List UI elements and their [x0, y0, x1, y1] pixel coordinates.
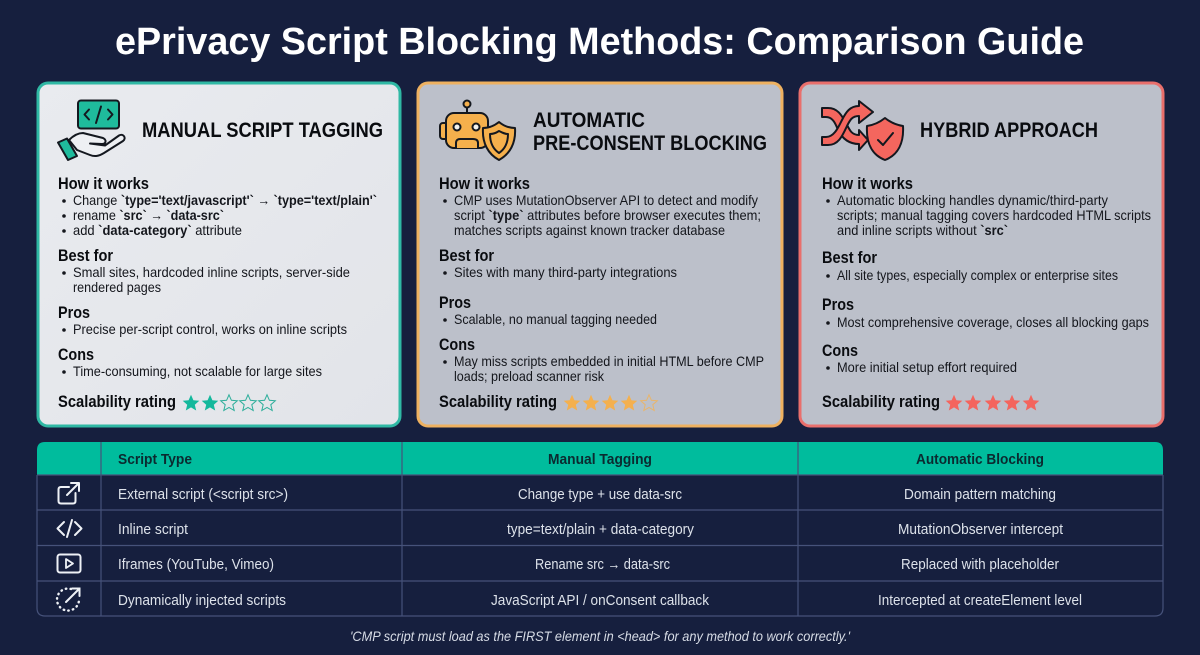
section: how it works: add `data-category` attribute — [73, 222, 242, 238]
section: pros — [58, 303, 347, 337]
scalability rating: 2 of 5: Scalability rating — [58, 392, 176, 411]
heading: automatic pre-consent blocking: AUTOMATIC — [533, 109, 645, 132]
section: how it works: CMP uses MutationObserver API to detect and modify — [454, 192, 758, 208]
section: how it works: How it works — [58, 174, 149, 193]
row: dynamically injected scripts: JavaScript API / onConsent callback — [491, 592, 709, 609]
icon: hand holding code — [58, 100, 125, 160]
row: external script — [58, 483, 1056, 504]
title: ePrivacy Script Blocking Methods: Comparison Guide — [115, 21, 1084, 63]
scalability rating: 4 of 5: Scalability rating — [439, 392, 557, 411]
row: dynamically injected scripts: Intercepted at createElement level — [878, 592, 1082, 609]
section: how it works: How it works — [822, 174, 913, 193]
section: how it works — [822, 174, 1151, 238]
scalability rating: 2 of 5 — [58, 392, 275, 411]
row: inline script — [58, 520, 1064, 538]
section: how it works: and inline scripts without `src` — [837, 222, 1008, 238]
section: how it works — [439, 174, 761, 238]
row: iframes: Iframes (YouTube, Vimeo) — [118, 556, 274, 573]
row: inline script: MutationObserver intercept — [898, 521, 1064, 538]
section: best for: Small sites, hardcoded inline scripts, server-side — [73, 264, 350, 280]
row: inline script: type=text/plain + data-category — [507, 521, 694, 538]
comparison table — [37, 442, 1163, 616]
section: cons — [822, 341, 1017, 375]
icon: code brackets — [58, 520, 82, 537]
section: pros: Precise per-script control, works on inline scripts — [73, 321, 347, 337]
footnote: 'CMP script must load as the FIRST element in <head> for any method to work correctly.' — [350, 628, 851, 644]
heading: manual script tagging: MANUAL SCRIPT TAGGING — [142, 119, 383, 142]
section: cons: Cons — [58, 345, 94, 364]
section: cons: Cons — [822, 341, 858, 360]
icon: dotted circle with arrow — [57, 588, 80, 611]
section: best for — [822, 248, 1118, 283]
icon: crossing arrows with shield — [822, 101, 903, 160]
table header: Automatic Blocking — [916, 451, 1044, 468]
section: best for — [439, 246, 677, 280]
section: pros: Pros — [58, 303, 90, 322]
section: how it works: matches scripts against known tracker database — [454, 222, 725, 238]
row: iframes: Replaced with placeholder — [901, 556, 1059, 573]
section: how it works: scripts; manual tagging covers hardcoded HTML scripts — [837, 207, 1151, 223]
section: pros: Most comprehensive coverage, closes all blocking gaps — [837, 314, 1149, 330]
section: how it works: script `type` attributes before browser executes them; — [454, 207, 761, 223]
section: best for: Sites with many third-party integrations — [454, 264, 677, 280]
section: how it works: Change `type='text/javascript'` → `type='text/plain'` — [73, 192, 377, 208]
section: cons: More initial setup effort required — [837, 359, 1017, 375]
row: external script: Domain pattern matching — [904, 486, 1056, 503]
row: inline script: Inline script — [118, 521, 189, 538]
table header — [37, 442, 1163, 475]
section: best for — [58, 246, 350, 295]
section: best for: Best for — [439, 246, 494, 265]
icon: robot with shield — [440, 100, 515, 160]
section: cons: Time-consuming, not scalable for large sites — [73, 363, 322, 379]
section: cons — [439, 335, 764, 384]
section: cons: May miss scripts embedded in initial HTML before CMP — [454, 353, 764, 369]
row: iframes — [58, 554, 1059, 573]
section: pros — [439, 293, 657, 327]
panel: manual script tagging — [38, 83, 400, 426]
icon: external link — [58, 483, 79, 504]
section: best for: Best for — [822, 248, 877, 267]
table header: Script Type — [118, 451, 192, 468]
section: pros: Pros — [439, 293, 471, 312]
icon: video player — [58, 554, 80, 572]
row: iframes: Rename src → data-src — [535, 556, 670, 573]
panel: hybrid approach — [800, 83, 1163, 426]
section: best for: Best for — [58, 246, 113, 265]
scalability rating: 5 of 5 — [822, 392, 1039, 411]
row: dynamically injected scripts — [57, 588, 1082, 611]
section: cons — [58, 345, 322, 379]
panel: automatic pre-consent blocking — [418, 83, 782, 426]
section: cons: loads; preload scanner risk — [454, 368, 605, 384]
section: how it works: How it works — [439, 174, 530, 193]
section: cons: Cons — [439, 335, 475, 354]
heading: automatic pre-consent blocking: PRE-CONSENT BLOCKING — [533, 132, 767, 155]
section: how it works — [58, 174, 377, 238]
section: pros: Scalable, no manual tagging needed — [454, 311, 657, 327]
row: dynamically injected scripts: Dynamically injected scripts — [118, 592, 286, 609]
scalability rating: 4 of 5 — [439, 392, 657, 411]
table header: Manual Tagging — [548, 451, 652, 468]
heading: hybrid approach: HYBRID APPROACH — [920, 119, 1098, 142]
heading: automatic pre-consent blocking — [533, 109, 767, 155]
section: how it works: Automatic blocking handles dynamic/third-party — [837, 192, 1108, 208]
section: best for: rendered pages — [73, 279, 161, 295]
section: pros: Pros — [822, 295, 854, 314]
scalability rating: 5 of 5: Scalability rating — [822, 392, 940, 411]
section: best for: All site types, especially complex or enterprise sites — [837, 267, 1118, 283]
row: external script: Change type + use data-src — [518, 486, 682, 503]
row: external script: External script (<script src>) — [118, 486, 288, 503]
section: pros — [822, 295, 1149, 330]
section: how it works: rename `src` → `data-src` — [73, 207, 224, 223]
